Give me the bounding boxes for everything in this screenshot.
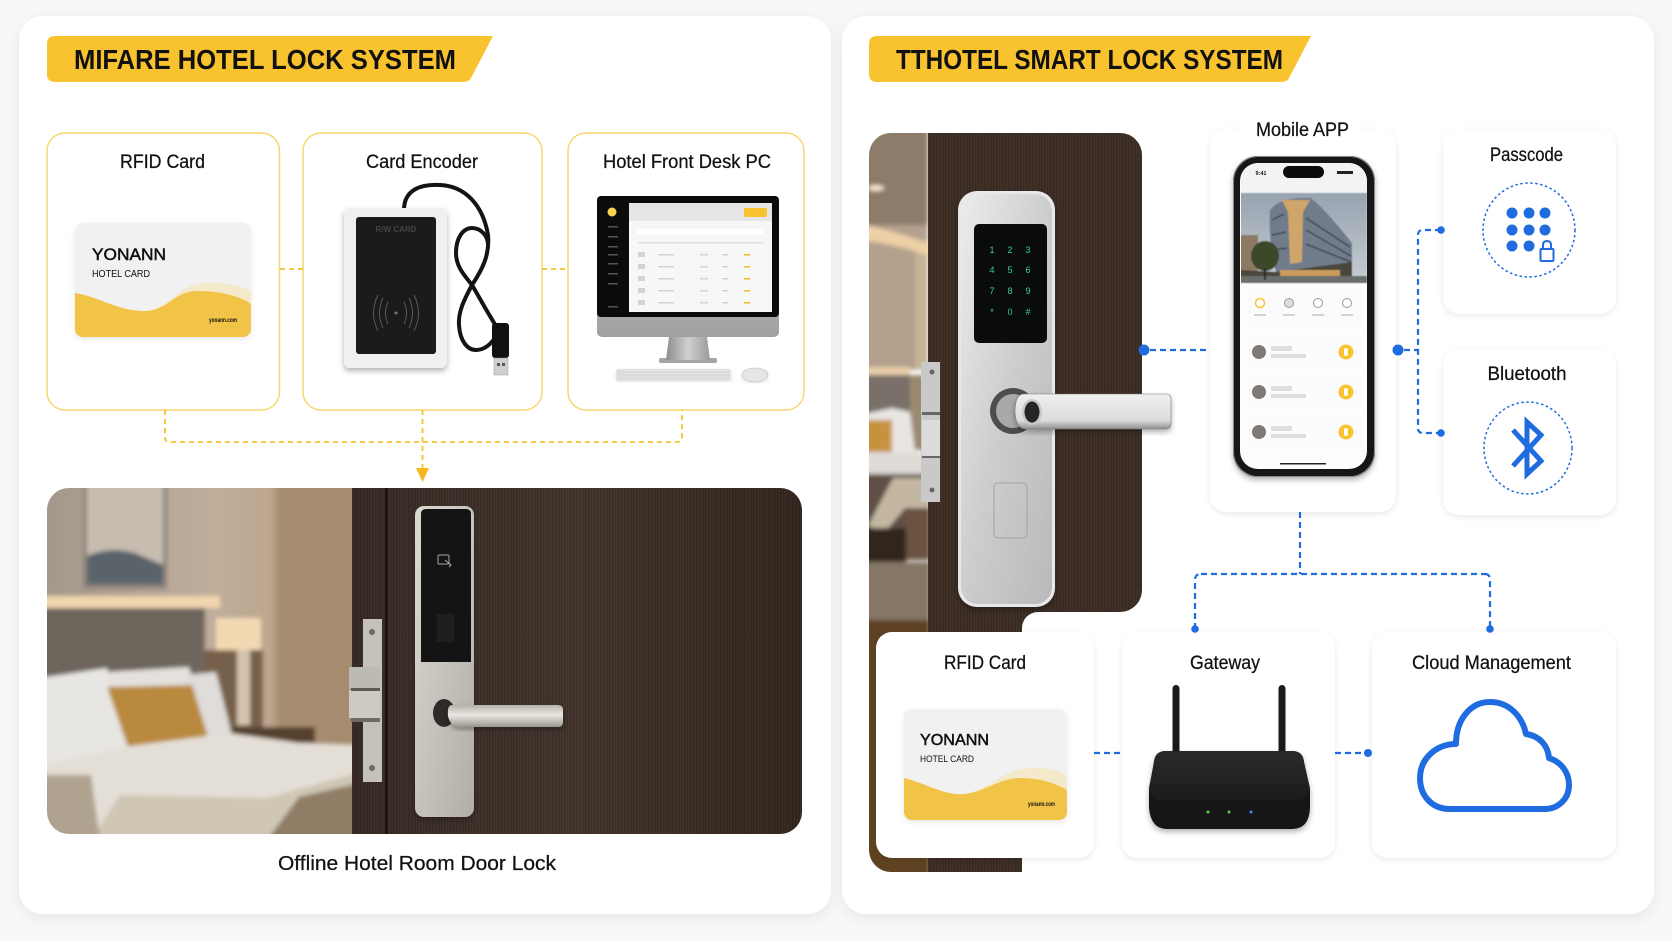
label: Cloud Management: Cloud Management (1412, 653, 1572, 674)
keypad digits: 7 (989, 286, 995, 296)
building photo (1240, 193, 1367, 283)
label: Bluetooth: Bluetooth (1488, 364, 1566, 385)
label: Mobile APP: Mobile APP (1256, 120, 1349, 141)
bed (40, 733, 360, 840)
image: encoder with USB cable (344, 185, 509, 375)
pillows (40, 667, 232, 765)
icon: cloud (1420, 702, 1569, 809)
image: RFID card: HOTEL CARD (92, 269, 150, 280)
lock latch (921, 362, 940, 502)
keypad digits: 5 (1007, 265, 1013, 275)
panel: TTHotel smart lock system (842, 16, 1654, 914)
photo: smart door lock (860, 125, 1142, 880)
image: RFID card: HOTEL CARD (920, 754, 974, 765)
image: desktop computer (597, 196, 779, 382)
app shortcut icons (1248, 288, 1361, 328)
image: RFID card: YONANN (92, 245, 166, 264)
keypad digits: 4 (989, 265, 995, 275)
component box: RFID card (smart system) (876, 632, 1094, 858)
lamp (205, 618, 263, 735)
phone with hotel app: 9:41 (1255, 171, 1267, 177)
component box: hotel front desk PC (568, 133, 804, 410)
keypad digits: 1 (989, 245, 995, 255)
keypad digits: 9 (1025, 286, 1031, 296)
door (352, 488, 802, 834)
keypad digits: 2 (1007, 245, 1013, 255)
caption: Offline Hotel Room Door Lock: Offline Hotel Room Door Lock (278, 853, 557, 875)
image: RFID card: yonann.com (209, 318, 237, 324)
image: RFID card (75, 223, 251, 337)
smart lock body with keypad (958, 191, 1171, 607)
image: RFID card (904, 709, 1067, 820)
heading: MIFARE banner: MIFARE HOTEL LOCK SYSTEM (74, 44, 456, 75)
image: encoder with USB cable: R/W CARD (376, 225, 417, 234)
phone with hotel app (1233, 156, 1375, 477)
keypad digits: 3 (1025, 245, 1031, 255)
component box: passcode (1443, 129, 1616, 314)
component box: RFID card (47, 133, 280, 410)
heading: MIFARE banner (47, 36, 493, 82)
label: Card Encoder: Card Encoder (366, 152, 479, 173)
image: router (1149, 685, 1310, 829)
component box: bluetooth (1443, 349, 1616, 515)
keypad digits: 8 (1007, 286, 1013, 296)
keypad digits: # (1025, 307, 1031, 317)
photo: offline hotel room door lock (40, 480, 802, 840)
keypad digits: * (990, 307, 994, 317)
label: RFID Card: RFID Card (120, 152, 205, 173)
icon: bluetooth symbol (1484, 402, 1572, 494)
image: RFID card: YONANN (920, 732, 989, 749)
blue connectors: smart lock to app to credentials (1094, 226, 1494, 757)
headboard (47, 606, 208, 678)
heading: TTHotel banner (869, 36, 1311, 82)
keypad digits (989, 245, 1031, 317)
strike plate (349, 619, 382, 782)
label: Gateway: Gateway (1190, 653, 1260, 674)
lock plate (415, 506, 563, 817)
image: RFID card: yonann.com (1028, 802, 1055, 808)
component box: cloud management (1372, 632, 1616, 858)
wall art (83, 480, 167, 589)
arrow: down to door lock (416, 468, 429, 482)
heading: TTHotel banner: TTHOTEL SMART LOCK SYSTEM (896, 44, 1283, 75)
component box: gateway (1122, 632, 1335, 858)
app list rows (1246, 336, 1362, 448)
label: RFID Card: RFID Card (944, 653, 1026, 674)
panel: MIFARE hotel lock system (19, 16, 831, 914)
keypad digits: 0 (1007, 307, 1013, 317)
keypad digits: 6 (1025, 265, 1031, 275)
label: Hotel Front Desk PC: Hotel Front Desk PC (603, 152, 771, 173)
icon: keypad with lock (1483, 183, 1575, 277)
component box: mobile app (1210, 118, 1396, 512)
yellow connectors between devices (165, 269, 682, 470)
component box: card encoder (303, 133, 542, 410)
label: Passcode: Passcode (1490, 145, 1563, 166)
